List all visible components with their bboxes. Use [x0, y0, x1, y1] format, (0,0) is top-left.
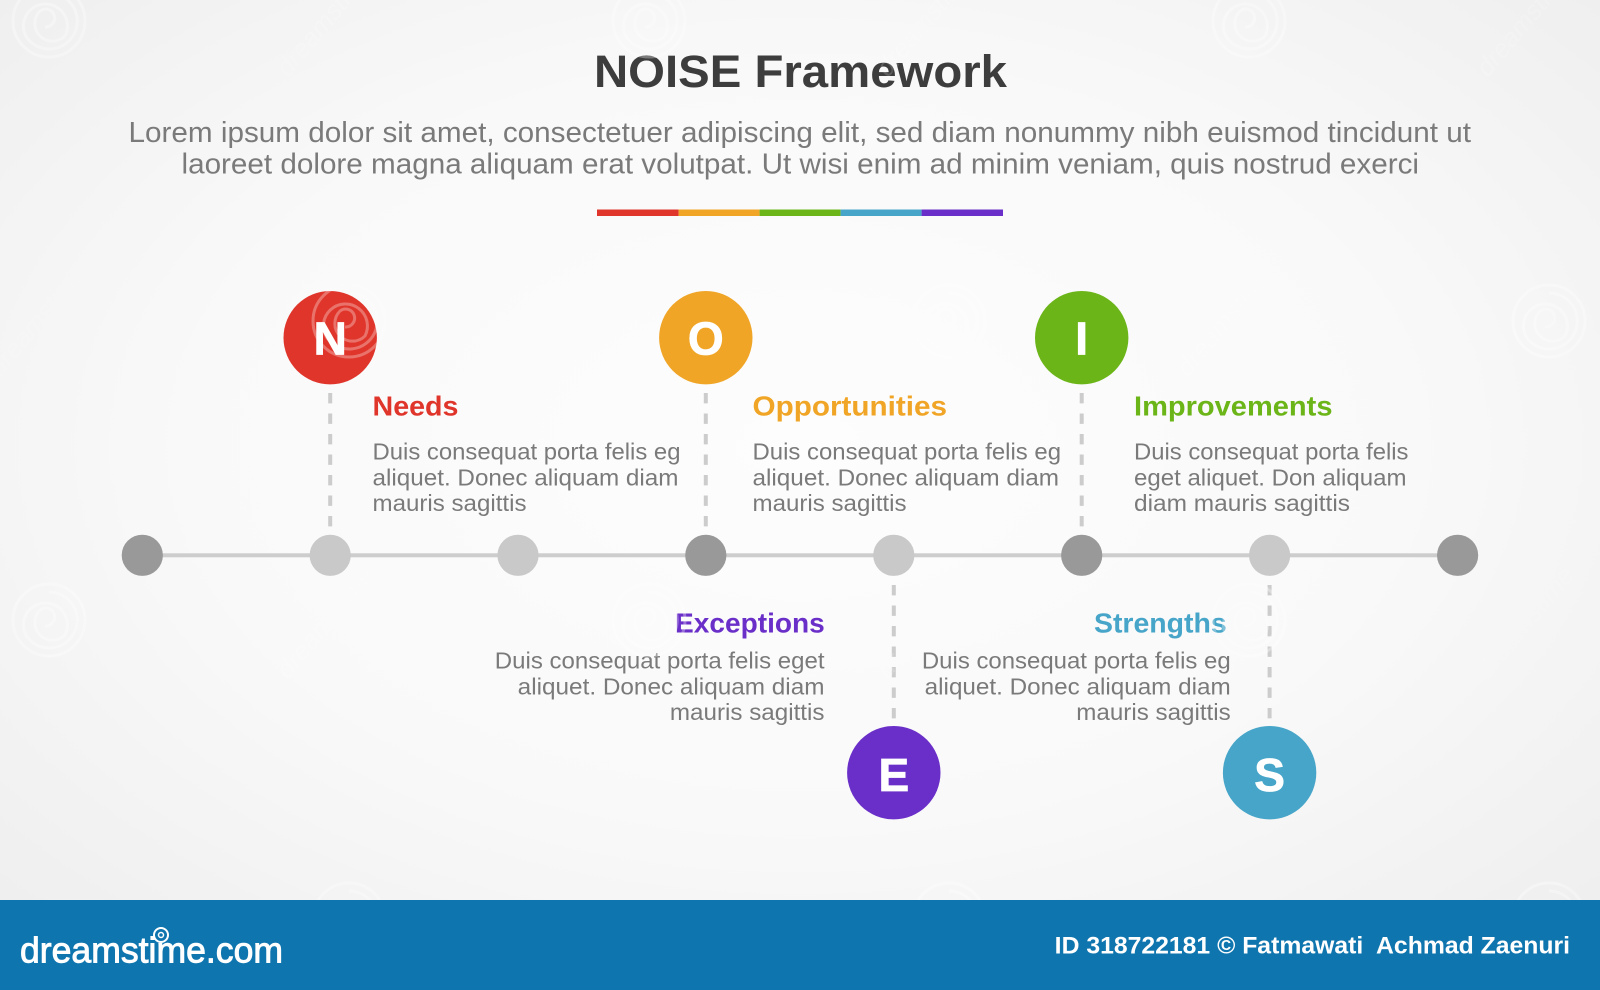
watermark overlay: dreamstime: [570, 259, 680, 382]
block: Needs: aliquet. Donec aliquam diam: [372, 464, 678, 490]
block: Opportunities: Duis consequat porta felis eg: [752, 438, 1061, 464]
badge: N: [284, 285, 385, 384]
block: Improvements: Improvements: [1134, 390, 1332, 421]
badge: S: [1223, 726, 1316, 819]
block: Strengths: Duis consequat porta felis eg: [922, 647, 1231, 673]
rainbow divider: [597, 210, 1003, 216]
footer band: [0, 900, 1600, 990]
block: Exceptions: [495, 608, 825, 725]
badge: S: S: [1254, 749, 1285, 801]
block: Strengths: Strengths: [1094, 608, 1227, 639]
block: Exceptions: aliquet. Donec aliquam diam: [518, 673, 824, 699]
connector: N: [328, 393, 332, 527]
block: Strengths: mauris sagittis: [1076, 699, 1231, 725]
block: Needs: Needs: [372, 390, 458, 421]
badge: I: [1035, 291, 1128, 384]
badge: E: [847, 726, 940, 819]
block: Exceptions: Duis consequat porta felis eget: [495, 647, 825, 673]
badge: I: I: [1075, 312, 1088, 364]
badge: O: O: [688, 312, 724, 364]
block: Opportunities: mauris sagittis: [752, 490, 906, 516]
block: Needs: Duis consequat porta felis eg: [372, 438, 680, 464]
watermark overlay: dreamstime: [1170, 259, 1280, 382]
block: Needs: [372, 390, 680, 516]
block: Improvements: eget aliquet. Don aliquam: [1134, 464, 1406, 490]
badge: N: N: [314, 312, 347, 364]
connector: I: [1080, 393, 1084, 527]
block: Exceptions: mauris sagittis: [670, 699, 824, 725]
footer logo: dreamstime.com: [20, 930, 283, 971]
subtitle text: [128, 117, 1471, 180]
block: Improvements: diam mauris sagittis: [1134, 490, 1350, 516]
badge: E: E: [878, 749, 909, 801]
subtitle text: Lorem ipsum dolor sit amet, consectetuer adipiscing elit, sed diam nonummy nibh euismod tincidunt ut: [128, 117, 1471, 149]
watermark overlay: dreamstime: [1470, 561, 1580, 684]
badge: O: [659, 291, 752, 384]
watermark overlay: dreamstime: [870, 561, 980, 684]
block: Opportunities: Opportunities: [752, 390, 947, 421]
block: Strengths: aliquet. Donec aliquam diam: [925, 673, 1231, 699]
subtitle text: laoreet dolore magna aliquam erat volutpat. Ut wisi enim ad minim veniam, quis nostrud exerci: [182, 148, 1419, 180]
timeline: [122, 535, 1478, 576]
block: Needs: mauris sagittis: [372, 490, 526, 516]
title: NOISE Framework: [594, 46, 1008, 97]
watermark overlay: dreamstime: [270, 561, 380, 684]
connector: E: [892, 585, 896, 719]
connector: S: [1268, 585, 1272, 719]
block: Exceptions: Exceptions: [675, 608, 825, 639]
block: Strengths: [922, 608, 1231, 725]
block: Opportunities: [752, 390, 1061, 516]
block: Improvements: Duis consequat porta felis: [1134, 438, 1408, 464]
block: Improvements: [1134, 390, 1408, 516]
footer credit: ID 318722181 © Fatmawati Achmad Zaenuri: [1055, 932, 1570, 959]
block: Opportunities: aliquet. Donec aliquam diam: [752, 464, 1059, 490]
connector: O: [704, 393, 708, 527]
